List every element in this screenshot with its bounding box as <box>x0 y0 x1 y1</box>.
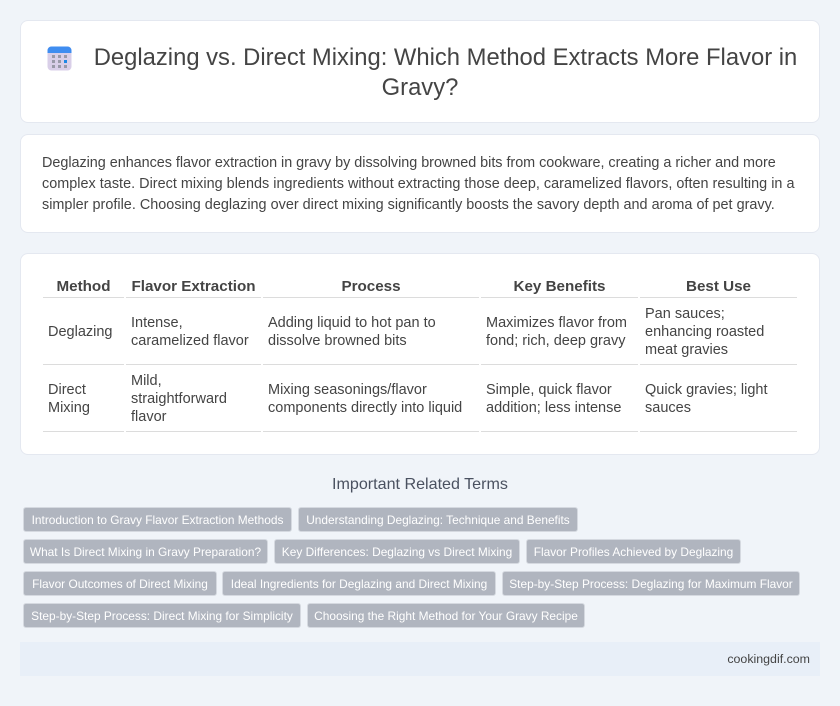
panel: comparison table: caramelized flavor <box>131 333 249 349</box>
related terms tags: Step-by-Step Process: Direct Mixing for Simplicity <box>31 609 293 623</box>
panel: comparison table: Mixing <box>48 400 90 416</box>
panel: comparison table: Maximizes flavor from <box>486 315 627 331</box>
panel: comparison table: meat gravies <box>645 342 728 358</box>
panel: comparison table: Mild, <box>131 373 162 389</box>
panel: comparison table: straightforward <box>131 391 227 407</box>
panel: summary text: complex taste. Direct mixing blends ingredients without extracting those deep, caramelized flavors, often resulting in a <box>42 176 794 192</box>
panel: comparison table: Adding liquid to hot pan to <box>268 315 436 331</box>
related terms tags: Ideal Ingredients for Deglazing and Direct Mixing <box>231 577 487 591</box>
related terms tags: Choosing the Right Method for Your Gravy Recipe <box>314 609 578 623</box>
related terms tags: Step-by-Step Process: Deglazing for Maximum Flavor <box>509 577 793 591</box>
heading: Deglazing vs. Direct Mixing: Which Method Extracts More Flavor in <box>94 44 797 71</box>
related terms tags: Key Differences: Deglazing vs Direct Mixing <box>282 545 512 559</box>
panel: comparison table: Intense, <box>131 315 183 331</box>
panel: summary text: Deglazing enhances flavor extraction in gravy by dissolving browned bits from cookware, creating a richer and more <box>42 155 776 171</box>
panel: comparison table: enhancing roasted <box>645 324 764 340</box>
related terms tags: What Is Direct Mixing in Gravy Preparation? <box>30 545 261 559</box>
panel: comparison table: Pan sauces; <box>645 306 725 322</box>
panel: comparison table: Process <box>341 278 401 295</box>
row: deglazing: Deglazing <box>48 324 112 340</box>
related terms tags: Introduction to Gravy Flavor Extraction Methods <box>32 513 283 527</box>
related terms heading: Important Related Terms <box>332 475 508 493</box>
panel: comparison table: Key Benefits <box>513 278 606 295</box>
panel: comparison table: flavor <box>131 409 166 425</box>
icon: calendar <box>48 46 72 70</box>
heading <box>94 44 797 101</box>
panel: comparison table: addition; less intense <box>486 400 621 416</box>
heading: Gravy? <box>382 74 458 101</box>
row: direct mixing: Direct <box>48 382 86 398</box>
related terms tags: Understanding Deglazing: Technique and Benefits <box>306 513 570 527</box>
panel: comparison table: dissolve browned bits <box>268 333 407 349</box>
table header: Method <box>56 278 110 295</box>
related terms tags: Flavor Profiles Achieved by Deglazing <box>534 545 733 559</box>
panel: comparison table: Flavor Extraction <box>131 278 256 295</box>
panel: comparison table <box>20 253 820 455</box>
panel: comparison table: sauces <box>645 400 691 416</box>
footer bar <box>20 642 820 676</box>
title card <box>20 20 820 123</box>
panel: summary text <box>20 134 820 233</box>
panel: comparison table: Mixing seasonings/flavor <box>268 382 427 398</box>
panel: comparison table: fond; rich, deep gravy <box>486 333 625 349</box>
panel: comparison table: Quick gravies; light <box>645 382 768 398</box>
panel: comparison table: Simple, quick flavor <box>486 382 612 398</box>
panel: summary text: simpler profile. Choosing deglazing over direct mixing significantly boosts the savory depth and aroma of pet gravy. <box>42 197 775 213</box>
related terms tags: Flavor Outcomes of Direct Mixing <box>32 577 208 591</box>
panel: comparison table: components directly into liquid <box>268 400 462 416</box>
footer credit: cookingdif.com <box>727 652 810 666</box>
panel: comparison table: Best Use <box>686 278 751 295</box>
